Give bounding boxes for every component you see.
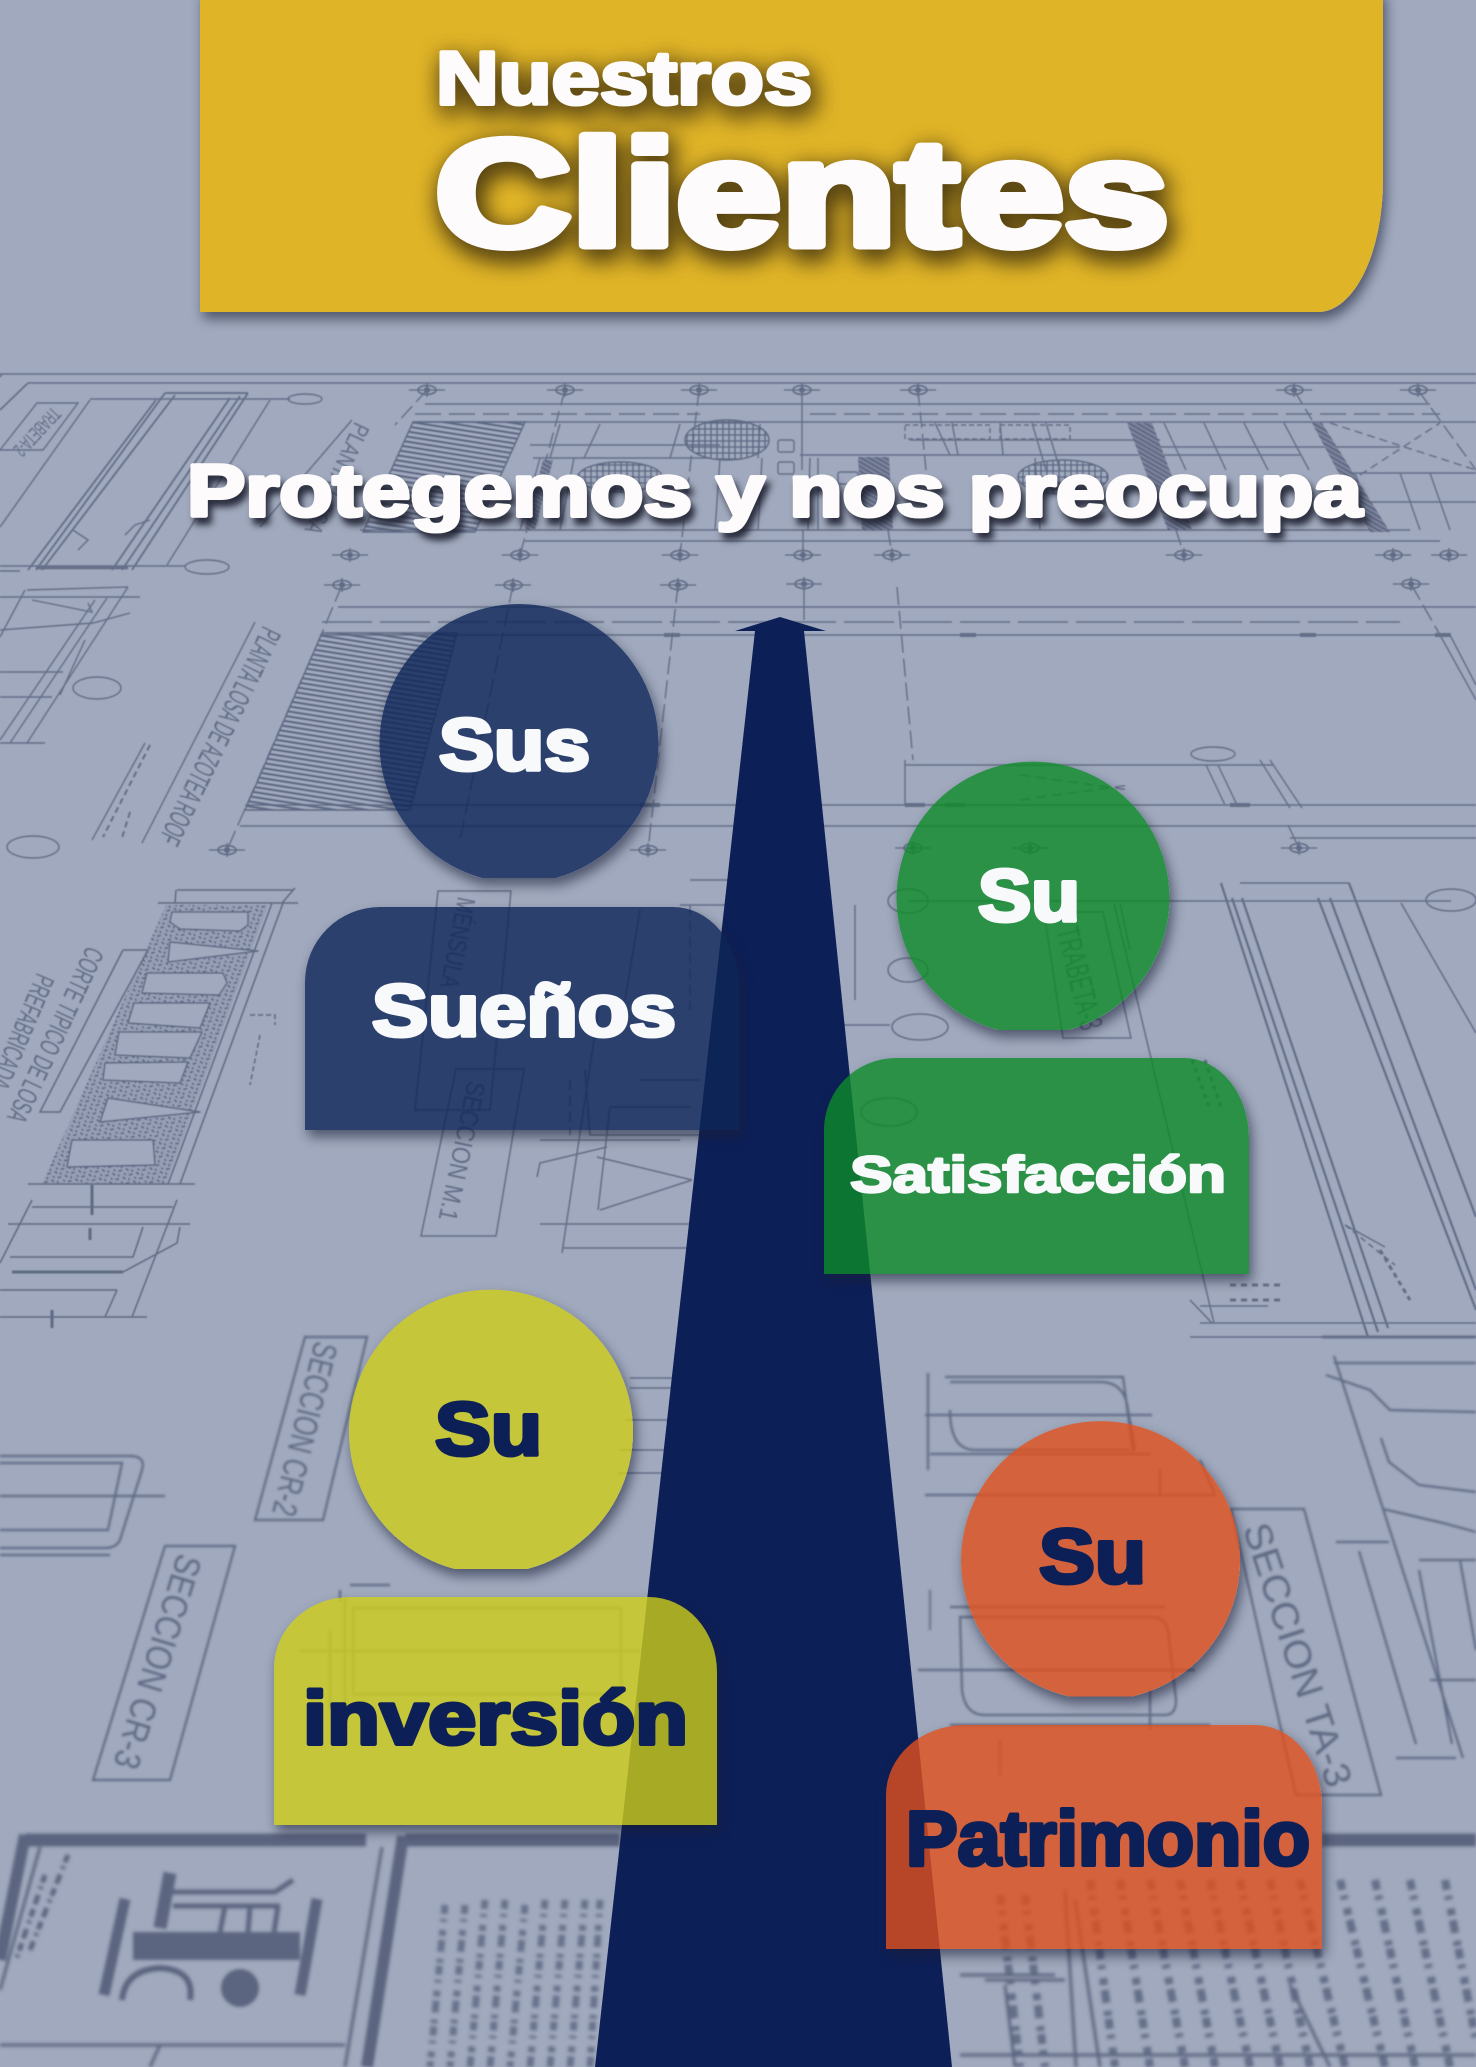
left beam TRABETA-2 xyxy=(0,393,322,574)
text: inversión: inversión xyxy=(303,1676,688,1760)
tab: Satisfacción xyxy=(824,1058,1249,1274)
circle: Su green xyxy=(896,762,1170,1030)
title: Nuestros xyxy=(436,36,812,120)
machine drawing xyxy=(133,1932,300,1960)
arrow xyxy=(595,617,952,2067)
text: Su orange: Su xyxy=(1039,1514,1146,1600)
group: Sus Sueños xyxy=(305,604,739,1130)
blueprint: upper plan xyxy=(0,374,1476,574)
group: Su Satisfacción xyxy=(824,762,1249,1274)
blueprint: lower labels: SECCION CR-3 xyxy=(105,1550,210,1774)
text: Su yellow: Su xyxy=(435,1387,542,1471)
circle: Sus xyxy=(379,604,659,878)
title xyxy=(435,36,1169,277)
blueprint: upper labels xyxy=(9,403,374,539)
tab: inversión xyxy=(274,1597,717,1825)
fine text columns xyxy=(16,1855,68,1960)
blueprint: labels middle: PLANTA LOSA DE AZOTEA ROOF xyxy=(152,622,286,850)
blueprint: section boxes and center details xyxy=(415,880,1476,1473)
upper-left detail xyxy=(0,587,140,743)
circle: Su yellow xyxy=(349,1290,633,1569)
blueprint: lower labels: SECCION CR-2 xyxy=(264,1338,344,1520)
blueprint: labels middle: SECCION M.1 xyxy=(433,1079,491,1224)
blueprint: hollow slab section xyxy=(0,888,298,1328)
blueprint: lower detail xyxy=(0,1337,1476,1795)
blueprint: labels middle: TRABETA-3 xyxy=(1049,923,1110,1034)
banner shape xyxy=(200,0,1383,312)
blueprint: labels middle: MÉNSULA xyxy=(434,895,482,991)
blueprint: upper labels: PLANTA LOSA xyxy=(299,418,374,539)
text: Sueños: Sueños xyxy=(372,971,676,1052)
dimension lines behind green xyxy=(905,760,1302,808)
blueprint: title block frames xyxy=(0,1835,1476,2067)
title: Clientes xyxy=(435,109,1169,277)
subtitle: Protegemos y nos preocupa xyxy=(187,451,1364,532)
text: Satisfacción: Satisfacción xyxy=(850,1146,1226,1203)
group: Su inversión xyxy=(274,1290,717,1825)
text: Patrimonio: Patrimonio xyxy=(906,1796,1310,1882)
blueprint: lower labels: SECCION TA-3 xyxy=(1234,1518,1359,1792)
tab: Patrimonio xyxy=(886,1725,1322,1949)
group: Su Patrimonio xyxy=(886,1421,1322,1949)
text: Sus: Sus xyxy=(439,705,590,786)
banner xyxy=(200,0,1383,312)
blueprint: middle plan xyxy=(0,577,1476,858)
text: Su green: Su xyxy=(978,856,1080,937)
blueprint: lower labels xyxy=(105,1338,1359,1792)
blueprint: labels middle xyxy=(0,622,1110,1224)
tab: Sueños xyxy=(305,907,739,1130)
circle: Su orange xyxy=(961,1421,1240,1696)
